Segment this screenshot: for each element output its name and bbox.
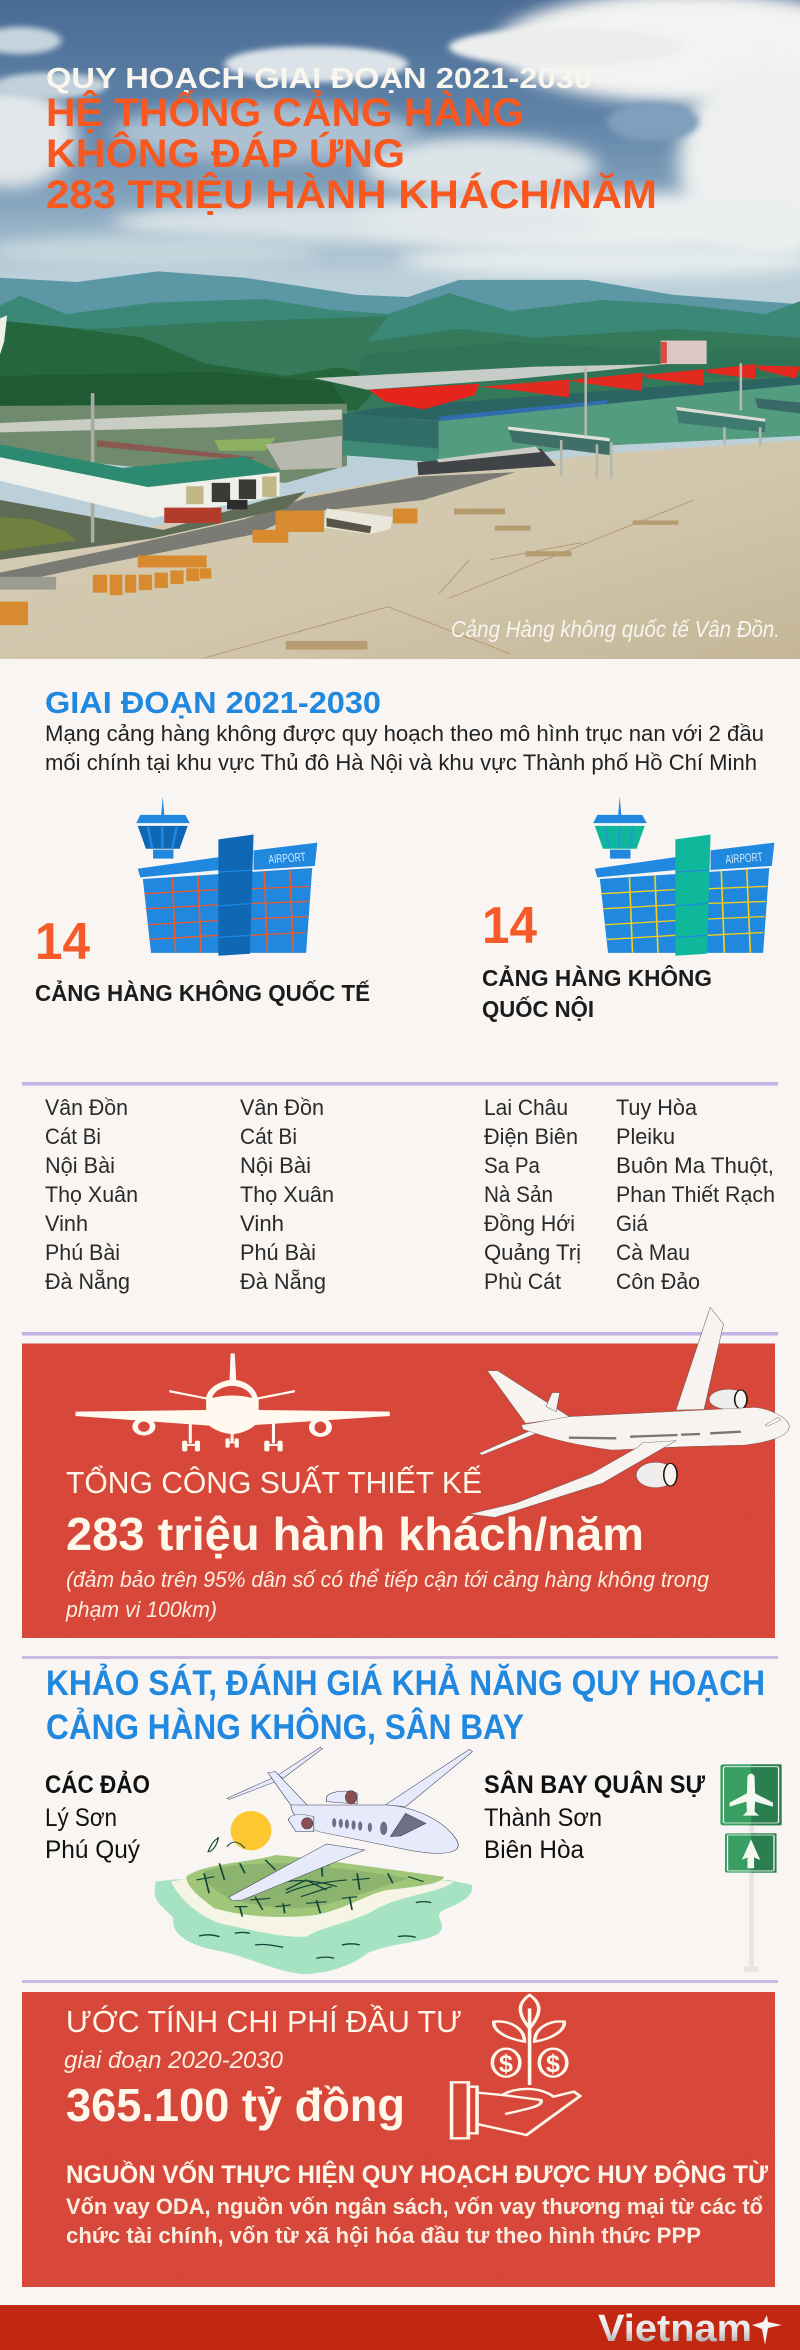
stat: 14 international airports: 14 xyxy=(35,913,90,971)
icon: plane front view xyxy=(76,1353,390,1451)
funding text: chức tài chính, vốn từ xã hội hóa đầu tư theo hình thức PPP xyxy=(66,2223,701,2248)
text: military airfields xyxy=(484,1769,705,1864)
text: islands: Phú Quý xyxy=(45,1836,140,1864)
capacity note xyxy=(65,1567,710,1622)
list: international airports: Nội Bài xyxy=(240,1153,311,1178)
list: international airports: Thọ Xuân xyxy=(45,1182,138,1207)
list: domestic airports: Đồng Hới xyxy=(484,1211,575,1236)
title block xyxy=(46,63,657,217)
text: military airfields: SÂN BAY QUÂN SỰ xyxy=(484,1769,705,1799)
footer band xyxy=(0,2305,800,2350)
text: military airfields: Biên Hòa xyxy=(484,1836,584,1864)
logo star xyxy=(752,2315,782,2345)
stat: 14 domestic airports: 14 xyxy=(482,897,537,955)
panel: total design capacity xyxy=(22,1344,775,1638)
panel: estimated investment xyxy=(22,1992,775,2287)
text: islands: CÁC ĐẢO xyxy=(45,1769,150,1799)
list: domestic airports xyxy=(484,1095,775,1294)
icon: international airport building xyxy=(136,797,317,956)
section heading: survey xyxy=(46,1663,765,1747)
cost value: 365.100 tỷ đồng xyxy=(66,2079,405,2131)
list: domestic airports: Côn Đảo xyxy=(616,1269,700,1294)
section heading: giai doan 2021-2030: GIAI ĐOẠN 2021-2030 xyxy=(45,685,381,720)
list: international airports: Vinh xyxy=(240,1211,284,1236)
intro paragraph: Mạng cảng hàng không được quy hoạch theo mô hình trục nan với 2 đầu xyxy=(45,721,764,746)
capacity value: 283 triệu hành khách/năm xyxy=(66,1508,644,1560)
list: international airports: Thọ Xuân xyxy=(240,1182,334,1207)
footer logo: Vietnam xyxy=(598,2308,752,2350)
icon: airport road signs xyxy=(720,1764,782,1972)
list: international airports: Cát Bi xyxy=(45,1124,101,1149)
icon: airliner xyxy=(469,1307,789,1517)
funding heading: NGUỒN VỐN THỰC HIỆN QUY HOẠCH ĐƯỢC HUY ĐỘNG TỪ xyxy=(66,2159,768,2189)
list: international airports: Đà Nẵng xyxy=(240,1269,326,1294)
list: domestic airports: Phù Cát xyxy=(484,1269,561,1294)
list: international airports: Đà Nẵng xyxy=(45,1269,130,1294)
list: international airports: Nội Bài xyxy=(45,1153,115,1178)
intro paragraph: mối chính tại khu vực Thủ đô Hà Nội và khu vực Thành phố Hồ Chí Minh xyxy=(45,750,757,775)
list: international airports: Phú Bài xyxy=(240,1240,316,1265)
list: domestic airports: Pleiku xyxy=(616,1124,675,1149)
capacity note: (đảm bảo trên 95% dân số có thể tiếp cận tới cảng hàng không trong xyxy=(66,1567,710,1592)
icon: international airport building: AIRPORT xyxy=(268,849,307,866)
text: islands: Lý Sơn xyxy=(45,1804,117,1832)
funding text: Vốn vay ODA, nguồn vốn ngân sách, vốn vay thương mại từ các tổ xyxy=(66,2194,763,2219)
list: domestic airports: Điện Biên xyxy=(484,1124,578,1149)
cost period: giai đoạn 2020-2030 xyxy=(64,2047,284,2074)
dollar signs: $ xyxy=(499,2050,513,2078)
panel: hero photo of Van Don airport xyxy=(0,0,800,670)
stat: 14 international airports xyxy=(35,913,370,1006)
section heading: survey: CẢNG HÀNG KHÔNG, SÂN BAY xyxy=(46,1707,524,1747)
list: domestic airports: Tuy Hòa xyxy=(616,1095,698,1120)
list: domestic airports: Lai Châu xyxy=(484,1095,568,1120)
list: domestic airports: Buôn Ma Thuột, xyxy=(616,1153,774,1178)
icon: hand with money plant xyxy=(452,1995,580,2138)
list: international airports: Vinh xyxy=(45,1211,88,1236)
list: domestic airports: Nà Sản xyxy=(484,1182,553,1207)
text: military airfields: Thành Sơn xyxy=(484,1804,602,1832)
stat: 14 international airports: CẢNG HÀNG KHÔNG QUỐC TẾ xyxy=(35,978,370,1006)
icon: domestic airport building: AIRPORT xyxy=(725,849,764,866)
capacity label: TỔNG CÔNG SUẤT THIẾT KẾ xyxy=(66,1464,482,1500)
stat: 14 domestic airports xyxy=(482,897,712,1022)
title block: QUY HOẠCH GIAI ĐOẠN 2021-2030 xyxy=(46,63,592,95)
dollar signs: $ xyxy=(546,2050,560,2078)
list: domestic airports: Phan Thiết Rạch xyxy=(616,1182,775,1207)
title block: 283 TRIỆU HÀNH KHÁCH/NĂM xyxy=(46,171,657,217)
list: international airports: Cát Bi xyxy=(240,1124,297,1149)
icon: domestic airport building xyxy=(593,797,774,956)
stat: 14 domestic airports: CẢNG HÀNG KHÔNG xyxy=(482,963,712,991)
dollar signs xyxy=(499,2050,560,2078)
list: domestic airports: Quảng Trị xyxy=(484,1240,581,1265)
intro paragraph xyxy=(45,721,764,775)
title block: KHÔNG ĐÁP ỨNG xyxy=(46,130,405,176)
funding text xyxy=(66,2194,763,2248)
capacity note: phạm vi 100km) xyxy=(65,1597,217,1622)
list: domestic airports: Cà Mau xyxy=(616,1240,690,1265)
cost heading: ƯỚC TÍNH CHI PHÍ ĐẦU TƯ xyxy=(66,2004,462,2039)
photo: clouds xyxy=(0,0,800,278)
list: domestic airports: Sa Pa xyxy=(484,1153,541,1178)
photo: mountains, terminal and apron xyxy=(0,271,800,670)
stat: 14 domestic airports: QUỐC NỘI xyxy=(482,995,594,1022)
list: domestic airports: Giá xyxy=(616,1211,649,1236)
list: international airports xyxy=(45,1095,334,1294)
list: international airports: Vân Đồn xyxy=(240,1095,324,1120)
list: international airports: Vân Đồn xyxy=(45,1095,128,1120)
title block: HỆ THỐNG CẢNG HÀNG xyxy=(46,89,524,135)
list: international airports: Phú Bài xyxy=(45,1240,120,1265)
icon: island with plane xyxy=(155,1747,472,1974)
text: islands xyxy=(45,1769,150,1864)
